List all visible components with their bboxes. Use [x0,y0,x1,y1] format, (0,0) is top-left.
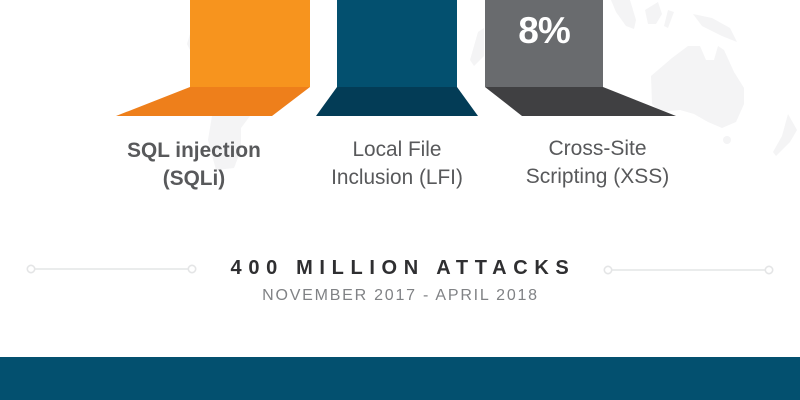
heading: 400 million attacks: 400 MILLION ATTACKS [231,257,575,279]
label: Cross-Site Scripting: Scripting (XSS) [526,165,669,188]
bar: Cross-Site Scripting [485,0,676,116]
bar: SQL injection [116,0,310,116]
label: SQL injection: (SQLi) [163,167,225,190]
percentage: 8%: 8% [518,10,570,51]
right connector line [604,266,774,274]
label: Cross-Site Scripting [526,137,669,188]
footer band [0,357,800,400]
label: Local File Inclusion: Local File [352,138,442,161]
bar: Local File Inclusion [316,0,478,116]
date range: NOVEMBER 2017 - APRIL 2018 [262,287,539,304]
label: Local File Inclusion [331,138,463,189]
label: SQL injection: SQL injection [127,139,261,162]
label: SQL injection [127,139,261,190]
label: Cross-Site Scripting: Cross-Site [548,137,647,160]
left connector line [26,264,196,274]
label: Local File Inclusion: Inclusion (LFI) [331,166,463,189]
